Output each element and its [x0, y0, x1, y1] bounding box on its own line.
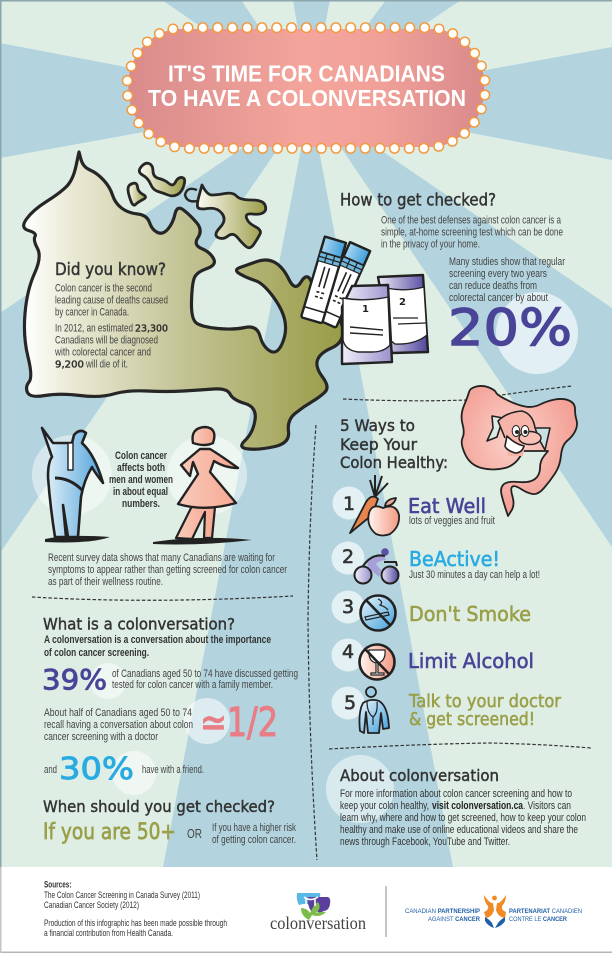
text block: affects both: Colon cancer: [115, 450, 168, 462]
map of Canada: [24, 152, 343, 449]
heading: what is a colonversation: What is a colonversation?: [43, 614, 235, 634]
text block: affects both: [109, 450, 173, 510]
text block: regular screening: [449, 256, 565, 304]
logo: colonversation: [270, 893, 366, 933]
title text: TO HAVE A COLONVERSATION: [148, 85, 466, 111]
text block: colon cancer facts: by cancer in Canada.: [55, 306, 129, 318]
text block: higher risk: If you have a higher risk: [212, 822, 296, 834]
text block: about: [340, 788, 586, 848]
heading: when should you get checked: When should you get checked?: [43, 797, 275, 816]
text block: sources: Sources:: [44, 880, 72, 890]
test tube 2: [316, 242, 370, 328]
stat: 20 percent: 20%: [448, 299, 572, 357]
logo: Canadian Partnership Against Cancer: [405, 895, 582, 928]
heading: did you know: Did you know?: [55, 260, 166, 280]
icon: no smoking: [360, 596, 396, 630]
logo: Canadian Partnership Against Cancer: AGAINST CANCER: [428, 916, 480, 923]
text block: affects both: affects both: [117, 462, 165, 474]
text block: doctor: recall having a conversation about colon: [44, 719, 193, 731]
panel: did you know: [54, 260, 168, 370]
text block: screening test: in the privacy of your home.: [381, 238, 480, 250]
item 2: be active: Just 30 minutes a day can help a lot!: [409, 569, 540, 581]
text block: higher risk: [212, 822, 296, 846]
stat: about one half: ≃1/2: [200, 700, 278, 746]
item 3: don't smoke: [332, 590, 531, 630]
logo: Canadian Partnership Against Cancer: PARTENARIAT CANADIEN: [509, 908, 582, 915]
text block: affects both: in about equal: [113, 486, 168, 498]
panel: 5 ways: [332, 416, 562, 733]
item 3: don't smoke: 3: [342, 596, 354, 618]
text block: colon cancer facts: leading cause of deaths caused: [55, 294, 168, 306]
icon: doctor: [359, 687, 389, 733]
stat: about one half: [184, 698, 278, 746]
text block: colon cancer facts: Canadians will be diagnosed: [55, 334, 158, 346]
item 3: don't smoke: Don't Smoke: [409, 602, 531, 626]
text block: family member: tested for colon cancer with a family member.: [112, 679, 273, 691]
text block: family member: [112, 668, 298, 691]
text block: survey data: [48, 552, 287, 588]
item 5: talk to your doctor: [332, 686, 562, 733]
text block: colon cancer facts: [54, 282, 168, 370]
heading: 5 ways to keep your colon healthy: Keep Your: [340, 435, 417, 454]
text block: definition: [44, 634, 271, 659]
text block: screening test: [381, 214, 563, 250]
icon: woman: [153, 427, 252, 544]
stat: 30 percent: 30%: [59, 752, 134, 787]
text block: about: visit colonversation.ca: [432, 800, 524, 812]
text block: colon cancer facts: with colorectal cancer and: [54, 346, 151, 358]
text block: doctor: [44, 707, 193, 743]
stat: 39 percent: 39%: [42, 663, 107, 696]
item 4: limit alcohol: 4: [342, 641, 354, 663]
face: eyes, nose and smile: [505, 426, 541, 453]
icon: cyclist: [354, 548, 398, 584]
stat: 39 percent: [42, 663, 126, 699]
logo: Canadian Partnership Against Cancer: CANADIAN PARTNERSHIP: [405, 908, 480, 915]
item 2: be active: [332, 542, 540, 584]
text block: colon cancer facts: 23,300: [135, 324, 168, 334]
text block: colon cancer facts: In 2012, an estimated: [55, 322, 133, 334]
item 1: eat well: [332, 475, 495, 536]
text block: about: . Visitors can: [523, 800, 571, 812]
text block: about: news through Facebook, YouTube and Twitter.: [340, 836, 510, 848]
text block: affects both: men and women: [109, 474, 173, 486]
icon: man: [32, 428, 112, 542]
stat: 30 percent: [59, 751, 156, 795]
test tube 1: [301, 237, 346, 323]
item 1: eat well: 1: [343, 493, 355, 515]
footer: [0, 867, 612, 953]
text: or: OR: [187, 826, 202, 841]
heading: about colonversation: About colonversation: [340, 766, 499, 785]
card 2: 2: [399, 297, 406, 308]
text block: regular screening: can reduce deaths from: [449, 280, 537, 292]
icon: carrot and apple: [350, 475, 399, 536]
panel: what is a colonversation: [42, 614, 298, 795]
marquee bulbs: [122, 23, 490, 153]
title text: IT'S TIME FOR CANADIANS: [168, 61, 445, 87]
item 4: limit alcohol: [332, 638, 534, 680]
item 5: talk to your doctor: 5: [344, 692, 356, 714]
icon: screening test kit: [301, 237, 428, 364]
text block: sources: Production of this infographic has been made possible through: [44, 918, 227, 928]
text block: regular screening: colorectal cancer by about: [449, 292, 548, 304]
logo: colonversation: colonversation: [270, 913, 366, 933]
text block: colon cancer facts: 9,200: [55, 360, 84, 370]
text block: sources: The Colon Cancer Screening in Canada Survey (2011): [44, 890, 200, 900]
item 1: eat well: lots of veggies and fruit: [409, 515, 495, 527]
stat: 20 percent: [448, 292, 578, 374]
text block: definition: of colon cancer screening.: [44, 647, 149, 659]
heading: 5 ways to keep your colon healthy: Colon Healthy:: [340, 453, 448, 472]
title marquee: [122, 23, 490, 153]
text block: family member: of Canadians aged 50 to 74 have discussed getting: [112, 668, 298, 680]
item 1: eat well: Eat Well: [408, 494, 486, 518]
item 2: be active: BeActive!: [409, 547, 500, 571]
text block: doctor: cancer screening with a doctor: [44, 731, 158, 743]
text block: regular screening: Many studies show that regular: [449, 256, 565, 268]
text block: about: keep your colon healthy,: [340, 800, 429, 812]
item 4: limit alcohol: Limit Alcohol: [408, 649, 534, 673]
text block: sources: Canadian Cancer Society (2012): [44, 900, 139, 910]
card 1: 1: [362, 304, 369, 315]
text block: doctor: About half of Canadians aged 50 to 74: [44, 707, 192, 719]
panel: when should you get checked: [43, 797, 296, 846]
panel: how to get checked: [340, 191, 578, 374]
item 2: be active: 2: [342, 546, 354, 568]
text block: affects both: numbers.: [122, 498, 160, 510]
icon: smiling colon character: [462, 386, 577, 516]
heading: how to get checked: How to get checked?: [340, 191, 496, 211]
title text: [148, 61, 466, 111]
text: and: and: [44, 764, 57, 776]
panel: about colonversation: [326, 755, 586, 848]
text block: higher risk: of getting colon cancer.: [212, 834, 296, 846]
heading: 5 ways to keep your colon healthy: 5 Ways to: [340, 416, 415, 435]
heading: 5 ways to keep your colon healthy: [340, 416, 448, 472]
callout: if you are 50+: If you are 50+: [43, 820, 176, 845]
item 5: talk to your doctor: & get screened!: [409, 709, 535, 730]
text: with a friend: have with a friend.: [142, 764, 204, 776]
icon: no alcohol: [360, 644, 394, 680]
text block: definition: A colonversation is a conversation about the importance: [44, 634, 271, 646]
text block: colon cancer facts: Colon cancer is the second: [55, 282, 152, 294]
text block: survey data: as part of their wellness routine.: [48, 576, 163, 588]
text block: sources: a financial contribution from Health Canada.: [44, 928, 173, 938]
text block: sources: [44, 880, 227, 938]
panel: men and women: [32, 427, 287, 588]
text block: colon cancer facts: will die of it.: [85, 358, 128, 370]
text block: survey data: symptoms to appear rather than getting screened for colon cancer: [48, 564, 287, 576]
text block: regular screening: screening every two years: [449, 268, 547, 280]
logo: Canadian Partnership Against Cancer: CONTRE LE CANCER: [509, 916, 567, 923]
item 5: talk to your doctor: Talk to your doctor: [408, 691, 562, 712]
text block: survey data: Recent survey data shows that many Canadians are waiting for: [48, 552, 275, 564]
